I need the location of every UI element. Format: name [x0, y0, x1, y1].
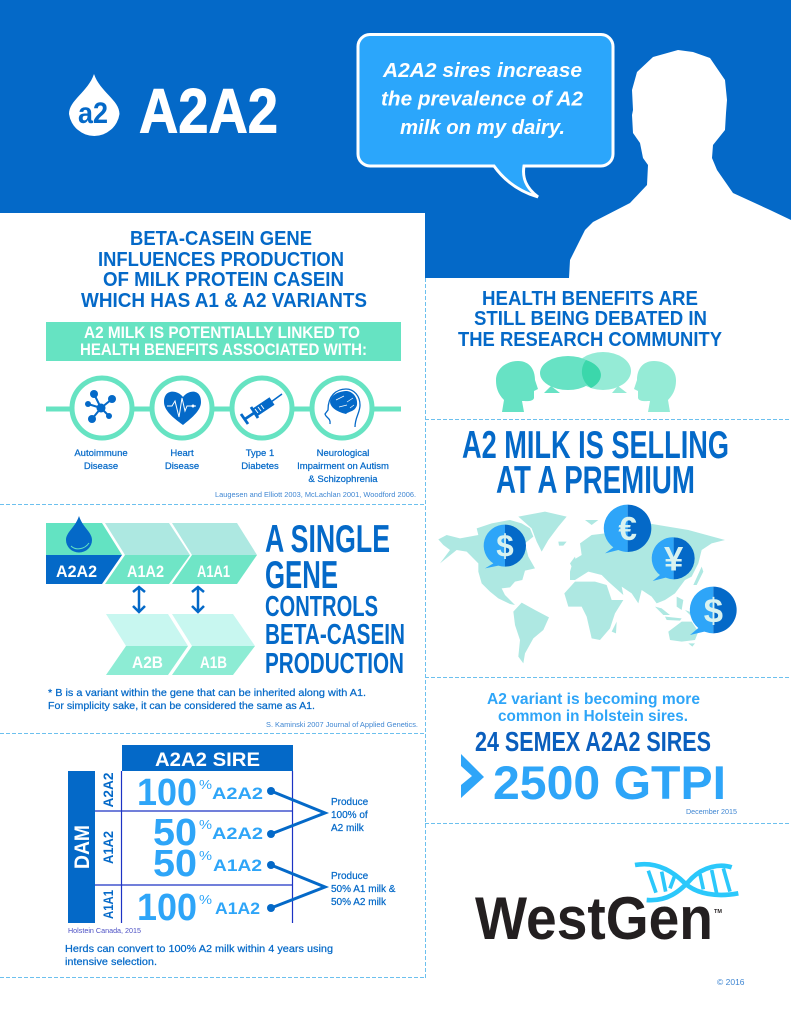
health icons row: [46, 378, 401, 485]
value 100% A1A2: A1A2: [215, 899, 260, 918]
citation: Laugesen and Elliott 2003, McLachlan 2001, Woodford 2006.: [215, 490, 416, 499]
label: neurological impairment: & Schizophrenia: [308, 474, 378, 485]
banner: linked health benefits: HEALTH BENEFITS ASSOCIATED WITH:: [80, 341, 367, 359]
panel: beta-casein gene: [46, 228, 416, 499]
heading: single gene: BETA-CASEIN: [265, 619, 405, 651]
note: herds: intensive selection.: [65, 957, 157, 968]
stat: 2500 GTPI: 2500 GTPI: [493, 756, 726, 809]
heading: beta-casein gene: [81, 228, 367, 312]
row label A2A2: A2A2: [100, 772, 116, 808]
coin: dollar Australia: $: [704, 592, 723, 630]
label: produce 50%: Produce: [331, 871, 368, 882]
arrow: A1A2 to A2B: [133, 587, 145, 612]
table: [68, 745, 293, 929]
coin: dollar North America: $: [496, 529, 514, 564]
value 100% A1A2: [137, 887, 260, 929]
chevron: A2B: [106, 614, 188, 675]
value 50% A1A2: 50: [153, 843, 197, 885]
man silhouette: [569, 50, 791, 278]
speech bubble: milk on my dairy.: [400, 117, 565, 139]
coin: euro: [604, 505, 651, 553]
coin: yen: ¥: [664, 541, 684, 579]
world map: [438, 512, 725, 663]
date note: December 2015: [686, 807, 737, 816]
label: neurological impairment: Neurological: [317, 448, 369, 459]
value 100% A2A2: 100: [137, 772, 197, 814]
panel: semex sires: [461, 691, 737, 816]
text: A2 variant: A2 variant is becoming more: [487, 691, 700, 708]
speech bubble: [358, 34, 613, 197]
panel: premium: [438, 424, 737, 663]
label: produce 100%: A2 milk: [331, 823, 365, 834]
label: autoimmune disease: Autoimmune: [74, 448, 128, 459]
value 100% A1A2: %: [199, 892, 212, 907]
coin: euro: €: [618, 511, 637, 548]
value 50% A1A2: %: [199, 848, 212, 863]
chevrons: genotypes: [46, 516, 257, 675]
logo: WestGen: WestGen: [475, 885, 713, 952]
heading: single gene: A SINGLE: [265, 518, 390, 561]
label: heart disease: Disease: [165, 461, 199, 472]
icon: a2 milk drop logo: [69, 74, 120, 136]
chevron: A2A2: [46, 516, 122, 584]
icon: autoimmune network: [72, 378, 132, 438]
label: produce 100%: Produce: [331, 797, 368, 808]
note: herds: [65, 944, 333, 968]
label: type 1 diabetes: Type 1: [246, 448, 274, 459]
citation: Holstein Canada, 2015: [68, 926, 141, 935]
coin: dollar North America: [484, 525, 526, 568]
copyright: © 2016: [717, 977, 745, 987]
label: autoimmune disease: Disease: [84, 461, 118, 472]
chevron: A1A2: [105, 523, 190, 584]
banner: linked health benefits: A2 MILK IS POTENTIALLY LINKED TO: [84, 324, 360, 342]
value 100% A2A2: [137, 772, 263, 814]
value 100% A1A2: 100: [137, 887, 197, 929]
label: heart disease: Heart: [170, 448, 194, 459]
icon: heart with pulse: [152, 378, 212, 438]
label: produce 100%: 100% of: [331, 810, 368, 821]
row label A1A2: A1A2: [100, 831, 116, 864]
value 100% A2A2: %: [199, 777, 212, 792]
footnote: * B is a variant within the gene that can be inherited along with A1.: [48, 688, 366, 699]
label: neurological impairment: Impairment on Autism: [297, 461, 389, 472]
value 50% A2A2: 50: [153, 812, 197, 854]
heading: beta-casein gene: WHICH HAS A1 & A2 VARIANTS: [81, 290, 367, 312]
connector: produce 50%: [267, 861, 325, 912]
arrow: A1A1 to A1B: [192, 587, 204, 612]
icon: drop: [66, 516, 92, 552]
connector: produce 100%: [267, 787, 325, 838]
heading: beta-casein gene: BETA-CASEIN GENE: [130, 228, 312, 250]
icon: debating heads: [496, 352, 676, 412]
chevron: A2A2: A2A2: [56, 562, 97, 581]
sire header: [122, 745, 293, 771]
heading: health debate: HEALTH BENEFITS ARE: [482, 288, 698, 310]
label: produce 50%: 50% A2 milk: [331, 897, 387, 908]
text: A2 variant: common in Holstein sires.: [498, 708, 688, 725]
panel: single gene: [46, 516, 418, 729]
footnote: [48, 688, 366, 712]
panel: health debate: [458, 288, 723, 412]
value 50% A2A2: %: [199, 817, 212, 832]
label: produce 50%: 50% A1 milk &: [331, 884, 396, 895]
heading: beta-casein gene: OF MILK PROTEIN CASEIN: [103, 269, 344, 291]
heading: health debate: [458, 288, 723, 351]
row label A1A1: A1A1: [100, 890, 116, 919]
value 50% A1A2: A1A2: [213, 856, 262, 875]
dna helix: [635, 864, 738, 900]
chevron: A2B: A2B: [132, 653, 163, 672]
dam header: [68, 771, 95, 923]
heading: beta-casein gene: INFLUENCES PRODUCTION: [98, 249, 344, 271]
header band: [0, 0, 791, 278]
heading: single gene: [265, 518, 405, 680]
chevron: A1A1: [172, 523, 257, 584]
panel: sire dam table: [65, 745, 396, 968]
value 100% A2A2: A2A2: [212, 784, 263, 803]
chevron: A1B: A1B: [200, 653, 227, 672]
text: A2 variant: [487, 691, 700, 725]
heading: single gene: PRODUCTION: [265, 648, 404, 680]
heading: single gene: GENE: [265, 554, 338, 597]
value 50% A2A2: A2A2: [212, 824, 263, 843]
speech bubble: the prevalence of A2: [381, 88, 583, 110]
citation: S. Kaminski 2007 Journal of Applied Genetics.: [266, 720, 418, 729]
icon: head with brain: [312, 378, 372, 438]
icon: greater than arrow: [461, 754, 484, 798]
speech bubble: A2A2 sires increase: [382, 60, 582, 82]
icon: syringe: [232, 378, 292, 438]
footnote: For simplicity sake, it can be considered the same as A1.: [48, 701, 315, 712]
dam header: DAM: [71, 825, 94, 869]
logo: WestGen: TM: [714, 909, 722, 915]
chevron: A1B: [172, 614, 255, 675]
heading: health debate: STILL BEING DEBATED IN: [474, 308, 707, 330]
heading: 24 semex sires: 24 SEMEX A2A2 SIRES: [475, 726, 711, 757]
coin: yen: [652, 537, 695, 581]
heading: selling at a premium: [462, 424, 729, 502]
banner: linked health benefits: [46, 322, 401, 361]
value 50% A1A2: [153, 843, 262, 885]
value 50% A2A2: [153, 812, 263, 854]
chevron: A1A2: A1A2: [127, 562, 164, 581]
icon: a2 milk drop logo: a2: [78, 97, 108, 130]
heading: selling at a premium: AT A PREMIUM: [496, 459, 695, 502]
coin: dollar Australia: [690, 587, 737, 635]
heading: single gene: CONTROLS: [265, 591, 378, 623]
chevron: A1A1: A1A1: [197, 562, 230, 581]
label: type 1 diabetes: Diabetes: [241, 461, 279, 472]
note: herds: Herds can convert to 100% A2 milk within 4 years using: [65, 944, 333, 955]
sire header: A2A2 SIRE: [155, 750, 260, 771]
logo title A2A2: A2A2: [139, 76, 278, 146]
heading: health debate: THE RESEARCH COMMUNITY: [458, 329, 723, 351]
